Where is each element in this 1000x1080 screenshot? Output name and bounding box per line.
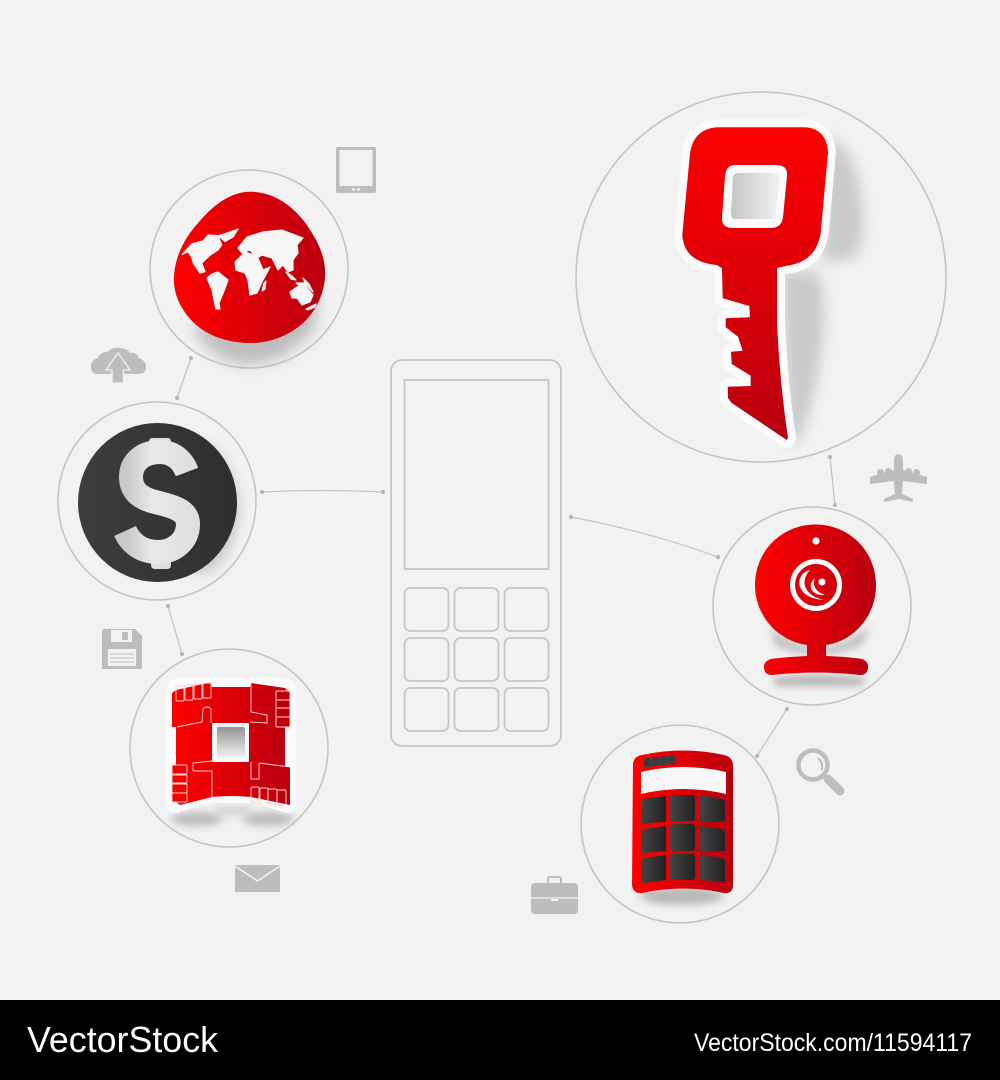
panel: key — [576, 92, 946, 462]
icon: tablet — [336, 147, 376, 193]
icon: floppy disk — [102, 629, 142, 669]
central phone outline — [391, 360, 561, 746]
key shadow — [782, 135, 863, 445]
footer url text: VectorStock.com/11594117 — [694, 1029, 972, 1057]
panel: calculator — [581, 725, 779, 923]
footer logo text: VectorStock — [27, 1019, 219, 1060]
icon: airplane — [870, 454, 927, 502]
panel: hands square — [130, 649, 328, 847]
icon: magnifier — [798, 750, 840, 791]
panel: dollar coin — [58, 402, 256, 600]
icon: dollar sign — [125, 438, 188, 569]
icon: cloud upload — [91, 348, 146, 383]
panel: globe — [150, 170, 348, 368]
panel: webcam — [713, 507, 911, 705]
icon: envelope — [235, 865, 280, 892]
connector lines — [166, 356, 837, 758]
footer bar — [0, 1000, 1000, 1080]
icon: briefcase — [531, 877, 578, 914]
world map — [182, 229, 316, 310]
